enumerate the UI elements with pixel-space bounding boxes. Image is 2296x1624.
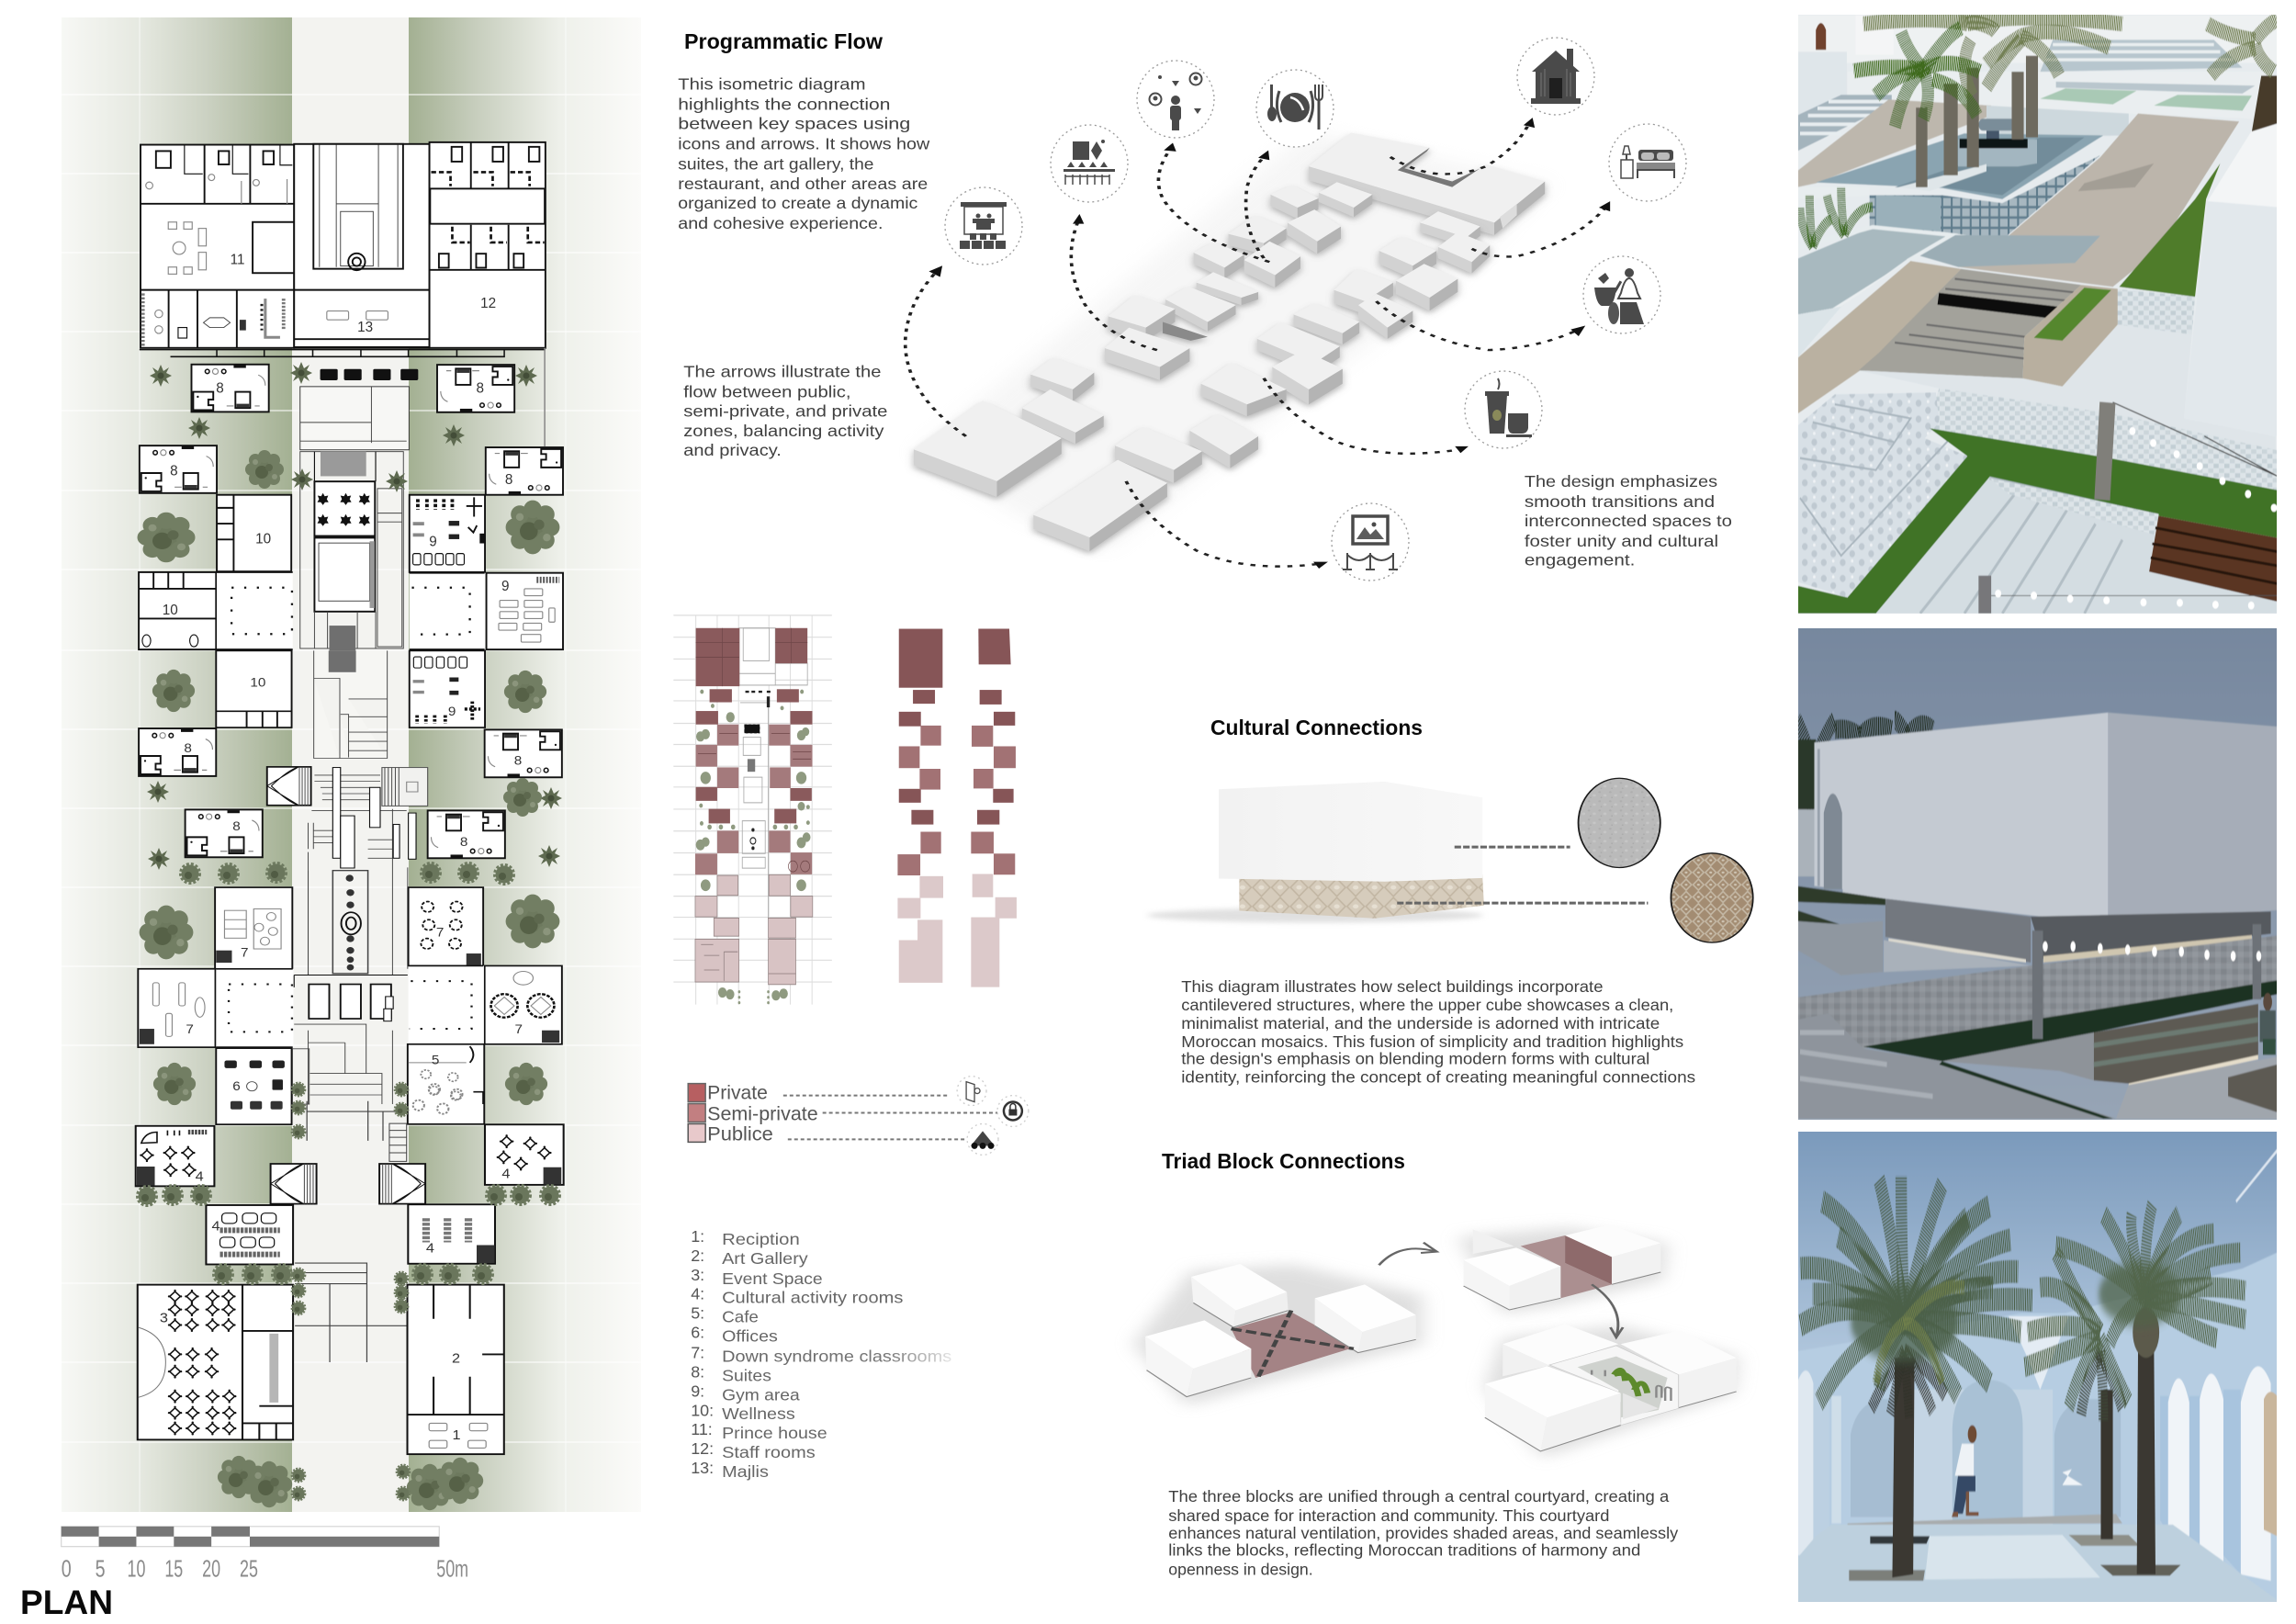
text: cultural connections description: This diagram illustrates how select buildings incorporate bbox=[1181, 977, 1604, 996]
text: design emphasis: foster unity and cultural bbox=[1525, 532, 1718, 550]
legend label: publice: Publice bbox=[707, 1123, 773, 1145]
steps bbox=[389, 1123, 407, 1161]
offices block 6 bbox=[216, 1048, 292, 1124]
pavilions bbox=[267, 767, 428, 806]
suite north row: 8 bbox=[505, 472, 512, 488]
chart: zone footprint diagram bbox=[897, 629, 1017, 987]
wellness block 10 west bbox=[139, 572, 216, 649]
cafe lower furniture bbox=[413, 1084, 462, 1114]
pavilions south bbox=[271, 1164, 425, 1204]
cultural room 4 south west: 4 bbox=[212, 1219, 220, 1234]
list labels bbox=[722, 1230, 951, 1481]
list numbers: 6: bbox=[691, 1324, 704, 1342]
cultural room 4 north east bbox=[485, 1124, 564, 1185]
text: triad description: enhances natural ventilation, provides shaded areas, and seamlessly bbox=[1168, 1524, 1679, 1542]
text: design emphasis: interconnected spaces to bbox=[1525, 512, 1732, 530]
public zones bbox=[695, 874, 813, 985]
art gallery block 2 and reception 1: 1 bbox=[452, 1428, 461, 1443]
list numbers: 4: bbox=[691, 1285, 704, 1303]
central details bbox=[745, 691, 771, 850]
gym block 9 east bbox=[487, 573, 563, 649]
isometric ground shadow bbox=[916, 130, 1550, 550]
upper cube bbox=[1219, 782, 1482, 882]
arrow: to conference bbox=[906, 265, 966, 436]
list numbers: 1: bbox=[691, 1227, 704, 1246]
step one: courtyard floor bbox=[1232, 1312, 1355, 1378]
central entry court bbox=[300, 387, 409, 668]
material swatch: moroccan mosaic bbox=[1671, 853, 1753, 942]
text: isometric diagram description: suites, the art gallery, the bbox=[678, 154, 873, 173]
wellness block 10 south bbox=[216, 650, 292, 727]
event space block 3: 3 bbox=[160, 1311, 168, 1325]
legend: privacy levels bbox=[688, 1077, 1029, 1155]
central plaza rooms bbox=[292, 975, 408, 1104]
scale bar: 0 bbox=[62, 1557, 72, 1583]
suite middle row bbox=[139, 728, 562, 858]
list labels: Majlis bbox=[722, 1462, 769, 1481]
suite middle row: 8 bbox=[184, 742, 192, 756]
seating row bbox=[321, 369, 418, 434]
scale bar: 25 bbox=[240, 1557, 258, 1583]
classroom 7 north east: 7 bbox=[436, 926, 444, 940]
step one: left block bbox=[1145, 1320, 1251, 1397]
gym block 9 south bbox=[410, 650, 485, 727]
main prince block bbox=[1309, 132, 1545, 235]
scale bar: 5 bbox=[96, 1557, 106, 1583]
zoning grid bbox=[673, 615, 832, 1005]
plan trees bbox=[138, 362, 562, 1510]
list labels: Suites bbox=[722, 1366, 771, 1384]
plan: south wing bbox=[136, 1084, 564, 1454]
icon: community people bbox=[1137, 61, 1214, 138]
arrow: step one to two bbox=[1379, 1243, 1436, 1265]
arrow: to house bbox=[1390, 118, 1535, 175]
isometric block set bbox=[914, 182, 1490, 551]
classroom 7 north west bbox=[215, 887, 292, 969]
leader line: mosaic bbox=[1397, 899, 1648, 908]
suite north row bbox=[140, 365, 563, 495]
step one: back block bbox=[1191, 1264, 1289, 1327]
prince house block 11 bbox=[141, 145, 294, 348]
text: isometric diagram description bbox=[678, 75, 929, 232]
fountain spine bbox=[309, 871, 368, 975]
walkway lines bbox=[295, 1101, 408, 1362]
text: arrows description: flow between public, bbox=[683, 382, 851, 400]
legend label: semi-private: Semi-private bbox=[707, 1103, 818, 1124]
list labels: Cafe bbox=[722, 1308, 759, 1326]
gym block 9 east: 9 bbox=[501, 579, 510, 594]
scale bar: 10 bbox=[127, 1557, 145, 1583]
text: design emphasis: The design emphasizes bbox=[1525, 472, 1717, 491]
list numbers: 12: bbox=[691, 1439, 714, 1458]
suite middle row: 8 bbox=[514, 754, 522, 768]
cultural room 4 south east bbox=[408, 1204, 495, 1264]
text: isometric diagram description: and cohesive experience. bbox=[678, 214, 883, 232]
icon: public crowd bbox=[967, 1123, 998, 1155]
suite north row: 8 bbox=[216, 380, 224, 396]
mini plan trees bbox=[696, 690, 811, 1004]
photo: terrace with pool and palms bbox=[1798, 15, 2277, 614]
heading: cultural connections: Cultural Connections bbox=[1210, 716, 1423, 739]
plan title: PLAN bbox=[20, 1584, 113, 1621]
list numbers: 11: bbox=[691, 1420, 713, 1438]
wellness block 10 north bbox=[217, 495, 291, 571]
text: cultural connections description: the design's emphasis on blending modern forms with cultural bbox=[1181, 1050, 1649, 1068]
step three: front block bbox=[1485, 1366, 1621, 1451]
icon: semi-private lock bbox=[997, 1096, 1029, 1126]
public blocks bbox=[897, 874, 1017, 987]
plan ground: right landscape bbox=[409, 17, 641, 1512]
wellness block 10 north: 10 bbox=[255, 532, 271, 547]
list numbers: 3: bbox=[691, 1266, 704, 1284]
text: design emphasis: smooth transitions and bbox=[1525, 492, 1715, 511]
classroom 7 east bbox=[485, 965, 562, 1044]
icon: private door bbox=[957, 1077, 986, 1106]
list labels: Event Space bbox=[722, 1269, 823, 1288]
courts south bbox=[216, 965, 484, 1047]
chart: triad block diagrams bbox=[1133, 1224, 1739, 1458]
list numbers: 8: bbox=[691, 1362, 704, 1381]
art gallery block 2 and reception 1: 2 bbox=[452, 1351, 460, 1367]
icon: conference room bbox=[945, 187, 1022, 265]
list numbers: 2: bbox=[691, 1246, 704, 1265]
list labels: Cultural activity rooms bbox=[722, 1289, 903, 1307]
classroom 7 north east bbox=[409, 887, 483, 965]
arrow: to cafe bbox=[1264, 378, 1469, 454]
heading: programmatic flow: Programmatic Flow bbox=[684, 29, 883, 53]
text: isometric diagram description: organized to create a dynamic bbox=[678, 194, 917, 212]
text: cultural connections description: minimalist material, and the underside is adorned with intricate bbox=[1181, 1014, 1660, 1032]
cultural room 4 south west bbox=[206, 1205, 293, 1264]
offices block 6: 6 bbox=[232, 1080, 241, 1094]
central stair walkway bbox=[309, 650, 416, 975]
scale bar: 50m bbox=[436, 1557, 468, 1583]
list numbers: 5: bbox=[691, 1304, 704, 1323]
panel: site plan bbox=[62, 17, 641, 1512]
text: cultural connections description bbox=[1181, 977, 1695, 1087]
private blocks bbox=[899, 629, 1015, 825]
cafe block 5: 5 bbox=[432, 1054, 439, 1067]
suite middle row: 8 bbox=[460, 836, 467, 850]
list labels: Gym area bbox=[722, 1385, 800, 1404]
text: arrows description: semi-private, and private bbox=[683, 401, 887, 420]
text: arrows description: and privacy. bbox=[683, 441, 782, 459]
icon: gallery bbox=[1332, 503, 1409, 581]
soft ambient shadows bbox=[1133, 1228, 1739, 1458]
step two: wall and floor bbox=[1521, 1235, 1612, 1298]
legend swatch: public bbox=[688, 1123, 705, 1142]
text: design emphasis: engagement. bbox=[1525, 551, 1635, 570]
courtyard person bbox=[1952, 1426, 1978, 1517]
gym block 9 south: 9 bbox=[448, 705, 456, 719]
chart: privacy zoning plan bbox=[673, 615, 832, 1005]
prince house block 11: 11 bbox=[231, 253, 244, 268]
list numbers: 9: bbox=[691, 1382, 704, 1400]
arrow: to restaurant bbox=[1246, 151, 1269, 258]
private zones bbox=[696, 628, 813, 823]
offices lower furniture bbox=[231, 1101, 283, 1110]
mosaic underside bbox=[1239, 874, 1484, 919]
list labels: Offices bbox=[722, 1327, 778, 1346]
list labels: Art Gallery bbox=[722, 1249, 808, 1268]
arrow: to bedroom bbox=[1472, 201, 1610, 256]
text: triad description: shared space for interaction and community. This courtyard bbox=[1168, 1506, 1609, 1525]
text: isometric diagram description: between key spaces using bbox=[678, 114, 910, 132]
photo: courtyard with date palms bbox=[1798, 1132, 2277, 1602]
gym block 9 north bbox=[410, 495, 485, 572]
classroom 7 north west: 7 bbox=[241, 946, 249, 960]
cultural room 4 north west: 4 bbox=[196, 1169, 204, 1185]
list labels: Staff rooms bbox=[722, 1443, 816, 1461]
list labels: Wellness bbox=[722, 1404, 795, 1423]
plan ground: left landscape bbox=[62, 17, 293, 1512]
text: isometric diagram description: highlights the connection bbox=[678, 96, 890, 114]
text: cultural connections description: identity, reinforcing the concept of creating meaningful connections bbox=[1181, 1068, 1695, 1087]
scale bar bbox=[62, 1527, 468, 1583]
cultural room 4 north east: 4 bbox=[501, 1167, 511, 1182]
suite middle row: 8 bbox=[232, 820, 241, 834]
text: cultural connections description: Moroccan mosaics. This fusion of simplicity and tradition highlights bbox=[1181, 1032, 1683, 1051]
legend: room numbers bbox=[691, 1227, 951, 1481]
wellness block 10 south: 10 bbox=[250, 676, 265, 690]
step one: connection dashes bbox=[1232, 1311, 1354, 1378]
classroom 7 west bbox=[138, 969, 216, 1047]
zoning room furniture lines bbox=[696, 628, 811, 872]
icon: bedroom bbox=[1609, 124, 1686, 201]
central walkway sketch bbox=[739, 628, 807, 919]
heading: triad block connections: Triad Block Connections bbox=[1162, 1149, 1405, 1173]
majlis and courtyard U 13: 13 bbox=[357, 320, 373, 335]
staff rooms block 12: 12 bbox=[480, 296, 496, 311]
list numbers: 10: bbox=[691, 1401, 714, 1419]
scale bar: 20 bbox=[202, 1557, 220, 1583]
legend swatch: private bbox=[688, 1084, 705, 1102]
list labels: Down syndrome classrooms bbox=[722, 1347, 951, 1365]
leader line: render bbox=[1455, 843, 1570, 851]
scale bar: 15 bbox=[164, 1557, 183, 1583]
step three: right block bbox=[1621, 1330, 1737, 1408]
arrow: to art space bbox=[1071, 214, 1157, 350]
classroom 7 east: 7 bbox=[515, 1023, 523, 1037]
plan: middle wing bbox=[138, 650, 562, 1124]
text: design emphasis bbox=[1525, 472, 1732, 570]
list labels: Prince house bbox=[722, 1424, 827, 1442]
list numbers bbox=[691, 1227, 714, 1477]
semi-private zones bbox=[695, 725, 813, 874]
icon: restaurant bbox=[1256, 70, 1334, 147]
chart: isometric programmatic flow diagram bbox=[906, 118, 1610, 569]
gym block 9 north: 9 bbox=[429, 535, 437, 550]
court east bbox=[410, 573, 485, 649]
majlis and courtyard U 13 bbox=[294, 144, 430, 348]
text: arrows description: The arrows illustrate the bbox=[683, 362, 881, 380]
arrow: to cultural bbox=[1377, 301, 1585, 350]
list numbers: 7: bbox=[691, 1344, 704, 1362]
icon: moroccan culture bbox=[1583, 256, 1660, 333]
step one: right block bbox=[1315, 1284, 1416, 1353]
text: triad description: openness in design. bbox=[1168, 1561, 1313, 1579]
text: cultural connections description: cantilevered structures, where the upper cube showcases a clean, bbox=[1181, 996, 1673, 1014]
ground shadow bbox=[1147, 908, 1483, 922]
icon: art workshop bbox=[1051, 125, 1128, 202]
material swatch: white render bbox=[1579, 778, 1660, 867]
text: triad description bbox=[1168, 1487, 1679, 1579]
text: isometric diagram description: This isometric diagram bbox=[678, 75, 865, 94]
cultural room 4 north west bbox=[136, 1126, 214, 1186]
plan: north wing bbox=[139, 142, 563, 668]
step two: front block bbox=[1464, 1247, 1560, 1310]
legend label: private: Private bbox=[707, 1083, 768, 1104]
arrow: to gallery bbox=[1126, 481, 1328, 569]
arrow: step two to three bbox=[1592, 1284, 1623, 1337]
text: arrows description: zones, balancing activity bbox=[683, 422, 884, 440]
chart: cantilever cube diagram bbox=[1147, 778, 1753, 942]
text: arrows description bbox=[683, 362, 887, 459]
text: isometric diagram description: restaurant, and other areas are bbox=[678, 175, 928, 193]
event space block 3 bbox=[138, 1285, 293, 1439]
text: triad description: The three blocks are unified through a central courtyard, creating a bbox=[1168, 1487, 1670, 1506]
step three: back block bbox=[1503, 1325, 1618, 1376]
court west bbox=[216, 572, 293, 649]
step two: right block bbox=[1565, 1224, 1660, 1284]
cultural room 4 south east: 4 bbox=[426, 1241, 434, 1257]
classroom 7 west: 7 bbox=[186, 1023, 194, 1037]
art gallery block 2 and reception 1 bbox=[408, 1285, 504, 1454]
staff rooms block 12 bbox=[430, 142, 546, 348]
legend swatch: semi-private bbox=[688, 1104, 705, 1122]
text: triad description: links the blocks, reflecting Moroccan traditions of harmony and bbox=[1168, 1541, 1640, 1560]
icon: cafe bbox=[1465, 371, 1542, 448]
icon: house bbox=[1517, 38, 1594, 115]
photo: cantilevered white building at dusk bbox=[1798, 628, 2277, 1120]
step two: back block bbox=[1473, 1229, 1514, 1254]
text: isometric diagram description: icons and arrows. It shows how bbox=[678, 134, 929, 152]
plan ground: central walkway bbox=[292, 17, 409, 1512]
step three: courtyard with arches bbox=[1549, 1346, 1679, 1426]
wellness block 10 west: 10 bbox=[163, 603, 178, 618]
arrow: to people bbox=[1158, 142, 1269, 262]
list labels: Reciption bbox=[722, 1230, 800, 1248]
list numbers: 13: bbox=[691, 1459, 714, 1477]
cafe block 5 bbox=[408, 1044, 484, 1124]
suite north row: 8 bbox=[476, 380, 484, 396]
suite north row: 8 bbox=[170, 464, 178, 479]
semi-private blocks bbox=[897, 726, 1016, 875]
